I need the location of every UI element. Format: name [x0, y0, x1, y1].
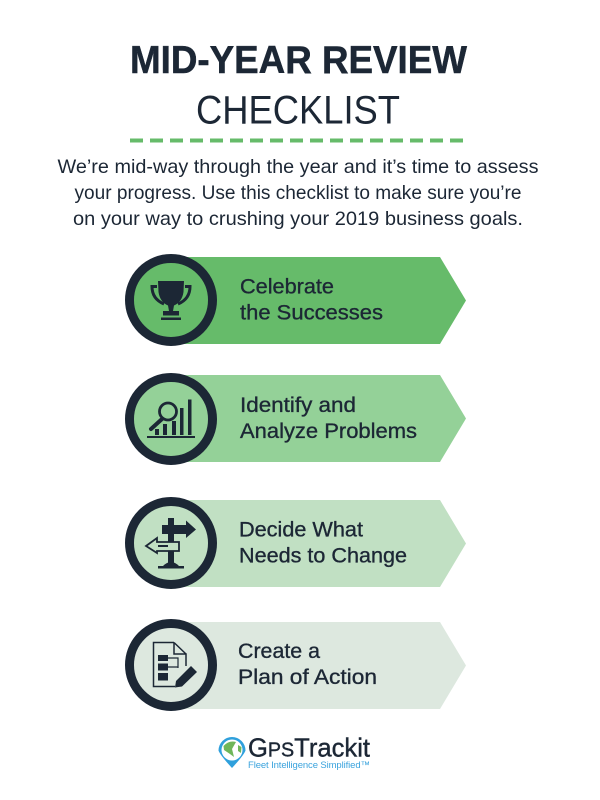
step 1: celebrate the successes: [130, 257, 466, 344]
label: [240, 274, 383, 324]
step 2: identify and analyze problems: [130, 375, 466, 462]
dashed divider: [130, 138, 464, 142]
intro text: on your way to crushing your 2019 business goals.: [73, 208, 523, 230]
icon: trophy: [152, 281, 190, 320]
title: [130, 39, 468, 132]
title: CHECKLIST: [196, 88, 400, 132]
icon: document and pencil: [154, 642, 197, 688]
icon: globe map pin: [218, 737, 246, 768]
title: MID-YEAR REVIEW: [130, 39, 468, 82]
label: Needs to Change: [239, 544, 407, 568]
label: Celebrate: [240, 274, 334, 298]
label: Plan of Action: [238, 665, 377, 689]
label: Create a: [238, 639, 320, 663]
label: [238, 639, 377, 689]
intro text: [58, 156, 539, 230]
label: Analyze Problems: [240, 419, 417, 443]
label: Decide What: [239, 518, 363, 542]
icon: signpost: [146, 518, 196, 568]
label: [240, 393, 417, 443]
label: the Successes: [240, 300, 383, 324]
label: Identify and: [240, 393, 356, 417]
wordmark: GPSTrackit: [248, 732, 371, 762]
step 3: decide what needs to change: [130, 500, 466, 587]
intro text: We’re mid-way through the year and it’s time to assess: [58, 156, 539, 178]
label: [239, 518, 407, 568]
tagline: Fleet Intelligence Simplified™: [248, 760, 370, 771]
logo: GPS Trackit: [218, 732, 371, 771]
icon: magnifier and bar chart: [147, 400, 195, 438]
step 4: create a plan of action: [130, 622, 466, 709]
intro text: your progress. Use this checklist to make sure you’re: [74, 182, 522, 204]
